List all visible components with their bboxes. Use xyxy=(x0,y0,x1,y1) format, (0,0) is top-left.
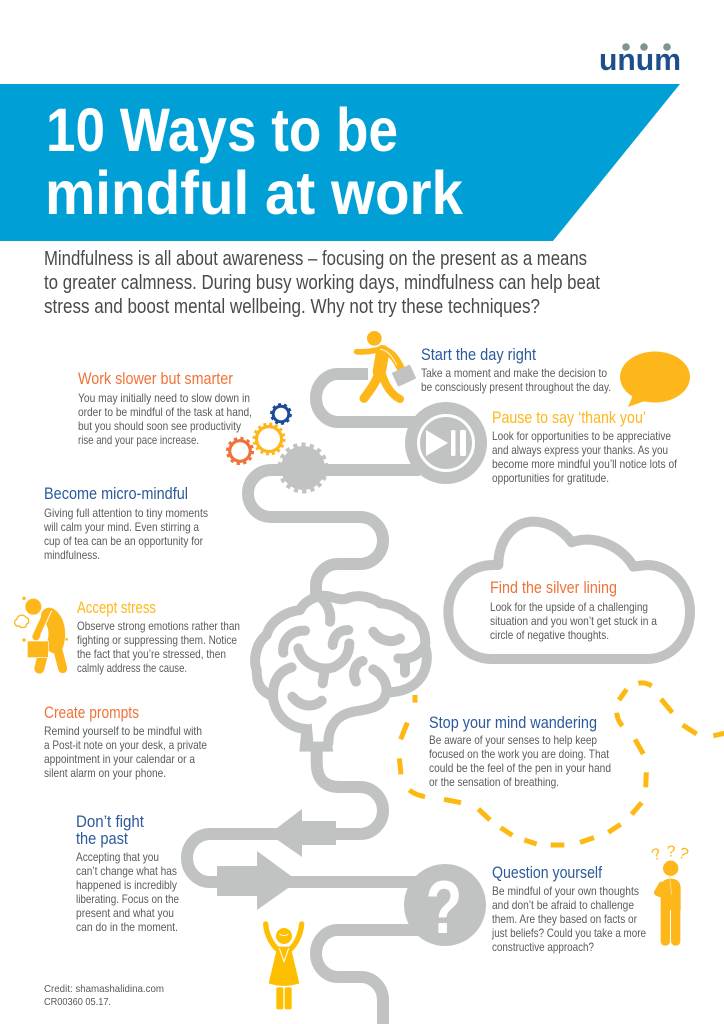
intro text: stress and boost mental wellbeing. Why not try these techniques? xyxy=(44,296,540,318)
icon: thinking person xyxy=(650,844,691,946)
tip: don't fight the past xyxy=(76,813,179,934)
tip: question yourself: Be mindful of your own thoughts xyxy=(492,884,639,898)
intro text: to greater calmness. During busy working days, mindfulness can help beat xyxy=(44,272,600,294)
large grey gear xyxy=(281,446,325,490)
tip: create prompts: Remind yourself to be mindful with xyxy=(44,724,202,738)
credit: CR00360 05.17. xyxy=(44,996,111,1008)
orange gear xyxy=(227,438,253,464)
tip: find the silver lining: circle of negative thoughts. xyxy=(490,628,609,642)
blue gear xyxy=(271,404,291,424)
question mark circle: ? xyxy=(426,867,462,950)
arrow: backward xyxy=(269,809,336,857)
tip: pause to say thank you: opportunities for gratitude. xyxy=(492,471,609,485)
tip: accept stress: fighting or suppressing them. Notice xyxy=(77,633,237,647)
tip: start the day right: Take a moment and make the decision to xyxy=(421,366,607,380)
tip: create prompts: a Post-it note on your desk, a private xyxy=(44,738,207,752)
intro text: Mindfulness is all about awareness – focusing on the present as a means xyxy=(44,248,587,270)
tip: start the day right xyxy=(421,346,611,394)
tip: become micro-mindful xyxy=(43,485,208,562)
winding path: upper xyxy=(248,374,420,600)
tip: pause to say thank you: become more mindful you’ll notice lots of xyxy=(492,457,678,471)
tip: don't fight the past: Don’t fight xyxy=(76,813,144,831)
tip: accept stress: Observe strong emotions rather than xyxy=(77,619,240,633)
title banner xyxy=(0,84,680,241)
icon: thinking person: ? xyxy=(667,844,676,861)
tip: work slower but smarter: rise and your pace increase. xyxy=(78,433,199,447)
tip: don't fight the past: present and what you xyxy=(76,906,174,920)
tip: stop your mind wandering: Be aware of your senses to help keep xyxy=(429,733,597,747)
tip: create prompts: appointment in your calendar or a xyxy=(44,752,195,766)
intro text xyxy=(44,248,600,318)
play and pause circle xyxy=(405,402,487,484)
tip: don't fight the past: happened is incredibly xyxy=(76,878,177,892)
tip: stop your mind wandering: Stop your mind wandering xyxy=(429,714,597,732)
tip: become micro-mindful: Giving full attention to tiny moments xyxy=(44,506,208,520)
tip: create prompts: silent alarm on your phone. xyxy=(44,766,166,780)
tip: pause to say thank you: Pause to say ‘thank you’ xyxy=(492,409,646,427)
tip: become micro-mindful: Become micro-mindful xyxy=(44,485,188,503)
tip: question yourself: Question yourself xyxy=(492,864,602,882)
icon: walking man xyxy=(357,331,416,399)
title xyxy=(45,96,463,227)
tip: work slower but smarter: order to be mindful of the task at hand, xyxy=(78,405,252,419)
tip: stop your mind wandering: or the sensation of breathing. xyxy=(429,775,559,789)
credit xyxy=(44,983,164,1008)
tip: accept stress xyxy=(77,599,240,675)
tip: pause to say thank you: Look for opportunities to be appreciative xyxy=(492,429,671,443)
tip: work slower but smarter xyxy=(78,370,252,447)
tip: create prompts: Create prompts xyxy=(44,704,139,722)
cloud outline xyxy=(448,522,690,659)
icon: stressed man xyxy=(15,597,68,669)
tip: question yourself: them. Are they based on facts or xyxy=(492,912,637,926)
icon: thinking person: ? xyxy=(676,845,691,864)
icon: thinking person: ? xyxy=(650,845,663,864)
tip: don't fight the past: the past xyxy=(76,830,128,848)
tip: find the silver lining: Find the silver lining xyxy=(490,579,617,597)
dashed wandering line xyxy=(399,683,724,845)
yellow gear xyxy=(254,424,284,454)
title: 10 Ways to be xyxy=(46,96,398,164)
tip: find the silver lining: Look for the upside of a challenging xyxy=(490,600,648,614)
tip: accept stress: Accept stress xyxy=(77,599,156,617)
tip: start the day right: be consciously present throughout the day. xyxy=(421,380,611,394)
tip: stop your mind wandering: could be the feel of the pen in your hand xyxy=(429,761,611,775)
tip: accept stress: calmly address the cause. xyxy=(77,661,187,675)
icon: speech bubble xyxy=(620,352,690,407)
tip: stop your mind wandering xyxy=(429,714,611,789)
tip: question yourself: just beliefs? Could you take a more xyxy=(491,926,646,940)
tip: find the silver lining: situation and you won’t get stuck in a xyxy=(490,614,657,628)
tip: accept stress: the fact that you’re stressed, then xyxy=(77,647,226,661)
tip: find the silver lining xyxy=(490,579,657,642)
tip: pause to say thank you xyxy=(492,409,678,485)
tip: create prompts xyxy=(44,704,207,780)
tip: question yourself: constructive approach? xyxy=(492,940,594,954)
logo: unum: unum xyxy=(599,42,681,77)
tip: work slower but smarter: but you should soon see productivity xyxy=(78,419,241,433)
title: mindful at work xyxy=(45,159,463,227)
tip: don't fight the past: Accepting that you xyxy=(76,850,159,864)
brain xyxy=(255,596,427,752)
tip: become micro-mindful: mindfulness. xyxy=(44,548,100,562)
winding path: lower xyxy=(187,750,420,1024)
arrow: forward xyxy=(217,851,298,910)
tip: don't fight the past: can do in the moment. xyxy=(76,920,178,934)
tip: question yourself xyxy=(491,864,646,954)
tip: become micro-mindful: cup of tea can be an opportunity for xyxy=(44,534,203,548)
credit: Credit: shamashalidina.com xyxy=(44,983,164,995)
tip: don't fight the past: liberating. Focus on the xyxy=(76,892,179,906)
tip: don't fight the past: can’t change what has xyxy=(76,864,177,878)
tip: work slower but smarter: You may initially need to slow down in xyxy=(78,391,250,405)
tip: start the day right: Start the day right xyxy=(421,346,536,364)
icon: woman with raised arms xyxy=(266,924,302,1009)
question mark circle xyxy=(404,864,486,950)
tip: question yourself: and don’t be afraid to challenge xyxy=(492,898,634,912)
tip: pause to say thank you: and always express your thanks. As you xyxy=(492,443,668,457)
tip: stop your mind wandering: focused on the work you are doing. That xyxy=(429,747,610,761)
tip: become micro-mindful: will calm your mind. Even stirring a xyxy=(43,520,199,534)
tip: work slower but smarter: Work slower but smarter xyxy=(78,370,233,388)
